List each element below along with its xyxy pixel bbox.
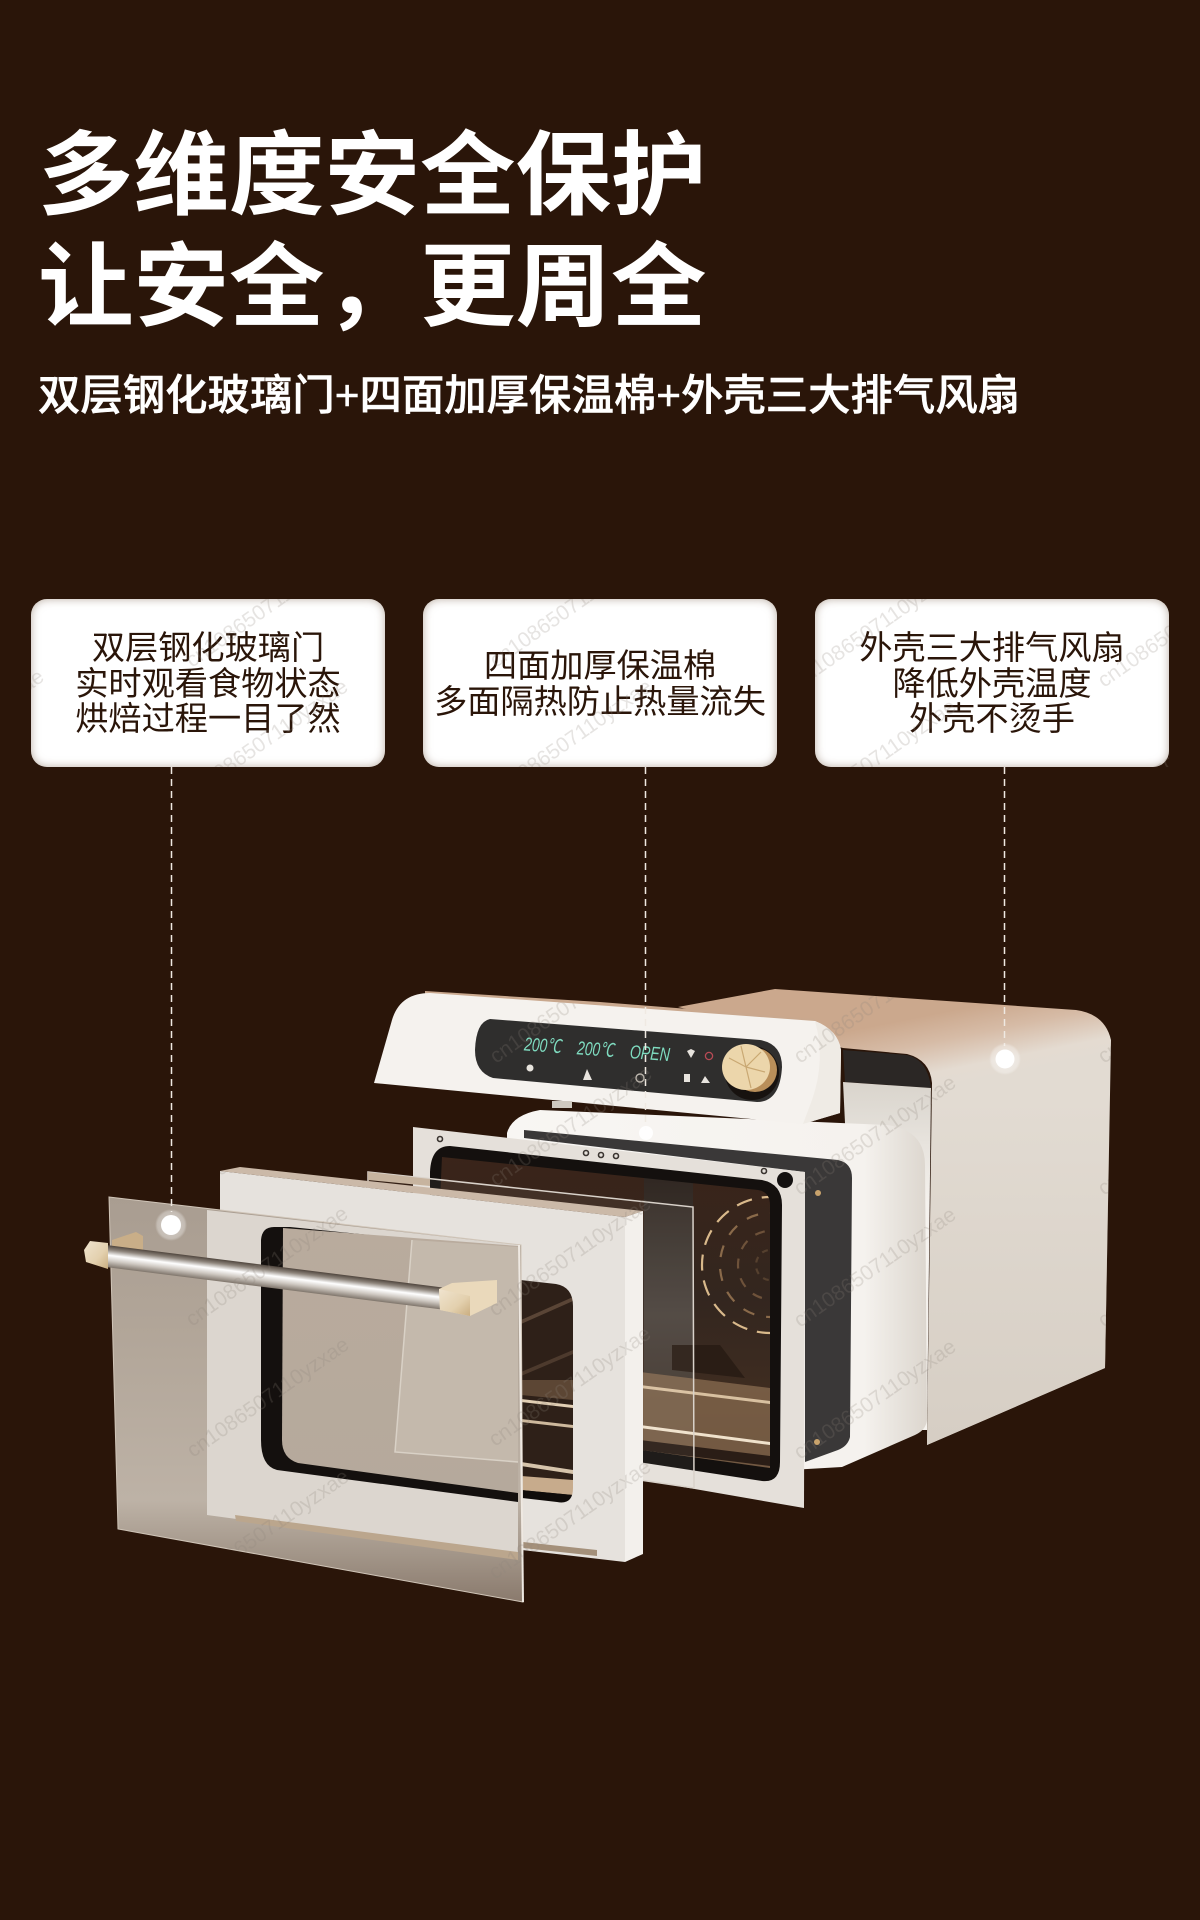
callout card: tempered glass door: 双层钢化玻璃门 [92,630,324,667]
callout card: insulation [423,599,777,767]
insulation white body [507,1110,927,1470]
front glass door [109,1197,523,1602]
watermark overlay: cn1086507110yzxae [485,1322,655,1451]
stainless handle rod [105,1245,443,1309]
display icons [526,1049,713,1083]
middle door bottom strip [523,1542,597,1556]
callout card: exhaust fans: 降低外壳温度 [892,666,1092,703]
callout card: tempered glass door: 烘焙过程一目了然 [75,701,341,738]
steel front frame [413,1127,805,1508]
watermark overlay: cn1086507110yzxae [485,1455,655,1584]
callout card: exhaust fans [815,599,1169,767]
leader line: shell fans [1004,767,1006,1046]
subtitle: 双层钢化玻璃门+四面加厚保温棉+外壳三大排气风扇 [38,372,1020,419]
leader line: insulation [644,767,646,1130]
watermark overlay: cn1086507110yzxae [790,1203,960,1332]
watermark overlay: cn1086507110yzxae [790,939,960,1068]
leader line: glass door [170,767,172,1212]
watermark overlay: cn1086507110yzxae [182,543,352,672]
watermark overlay: cn1086507110yzxae [182,1202,352,1331]
support post [552,1101,572,1108]
marker dot: glass door [155,1209,187,1241]
callout card: tempered glass door [31,599,385,767]
watermark overlay: cn1086507110yzxae [790,1335,960,1464]
frame dark ball and gold pins [777,1172,821,1445]
watermark overlay: cn1086507110yzxae [486,939,656,1068]
oven cavity interior [440,1157,770,1468]
watermark overlay: cn1086507110yzxae [486,1062,656,1191]
watermark overlay: cn1086507110yzxae [183,1465,353,1594]
callout card: insulation: 四面加厚保温棉 [484,648,716,685]
watermark overlay: cn1086507110yzxae [790,563,960,692]
interior seen through door window [262,1250,573,1506]
oven window gasket [430,1146,782,1481]
title: 让安全，更周全 [38,237,706,339]
inner glass pane [368,1172,694,1488]
oven dark cavity box [524,1130,852,1462]
glass reflection [395,1240,518,1462]
watermark overlay: cn1086507110yzxae [790,695,960,824]
watermark overlay: cn1086507110yzxae [183,1333,353,1462]
glass pane top strip [368,1172,430,1186]
title [38,125,706,339]
display readouts: 200℃ [576,1038,616,1062]
insulation back shading [843,1082,931,1430]
outer shell top face and side panel [678,989,1111,1445]
oven racks [640,1345,770,1470]
marker dot: insulation [639,1126,653,1140]
middle door top edge [220,1167,643,1217]
display readouts: 200℃ [523,1034,563,1058]
callout card: exhaust fans: 外壳不烫手 [909,701,1075,738]
handle back mount [112,1232,143,1250]
marker dot: shell fans [989,1043,1021,1075]
black gasket seen through glass [261,1227,518,1502]
title: 多维度安全保护 [38,125,706,227]
callout card: exhaust fans: 外壳三大排气风扇 [859,630,1125,667]
watermark overlay: cn1086507110yzxae [182,1071,352,1200]
watermark overlay: cn1086507110yzxae [486,543,656,672]
control panel [374,991,841,1124]
middle door frame [220,1167,643,1562]
panel right side [803,1021,841,1124]
callout card: insulation: 多面隔热防止热量流失 [434,684,766,720]
illustration: exploded oven with callout leader lines [84,767,1111,1603]
convection fan holes [700,1196,770,1334]
shell side lower shading [927,1100,1110,1445]
handle right cap [439,1280,497,1316]
middle door side edge [625,1211,643,1562]
frame seen through glass [207,1210,518,1557]
frame screws [438,1136,766,1174]
watermark overlay: cn1086507110yzxae [182,675,352,804]
watermark overlay: cn1086507110yzxae [486,675,656,804]
gold bottom strip [235,1515,518,1560]
display panel [475,1019,782,1102]
display readouts: OPEN [629,1042,671,1066]
display readouts [523,1034,671,1066]
watermark overlay: cn1086507110yzxae [790,1071,960,1200]
callout card: tempered glass door: 实时观看食物状态 [75,666,341,703]
shell dark inner band [843,1050,931,1088]
watermark overlay [31,599,1169,1560]
watermark overlay: cn1086507110yzxae [485,1192,655,1321]
glass right bright edge [519,1245,523,1602]
window seen through glass [282,1228,518,1493]
handle left cap [84,1241,108,1269]
knob [722,1044,779,1100]
